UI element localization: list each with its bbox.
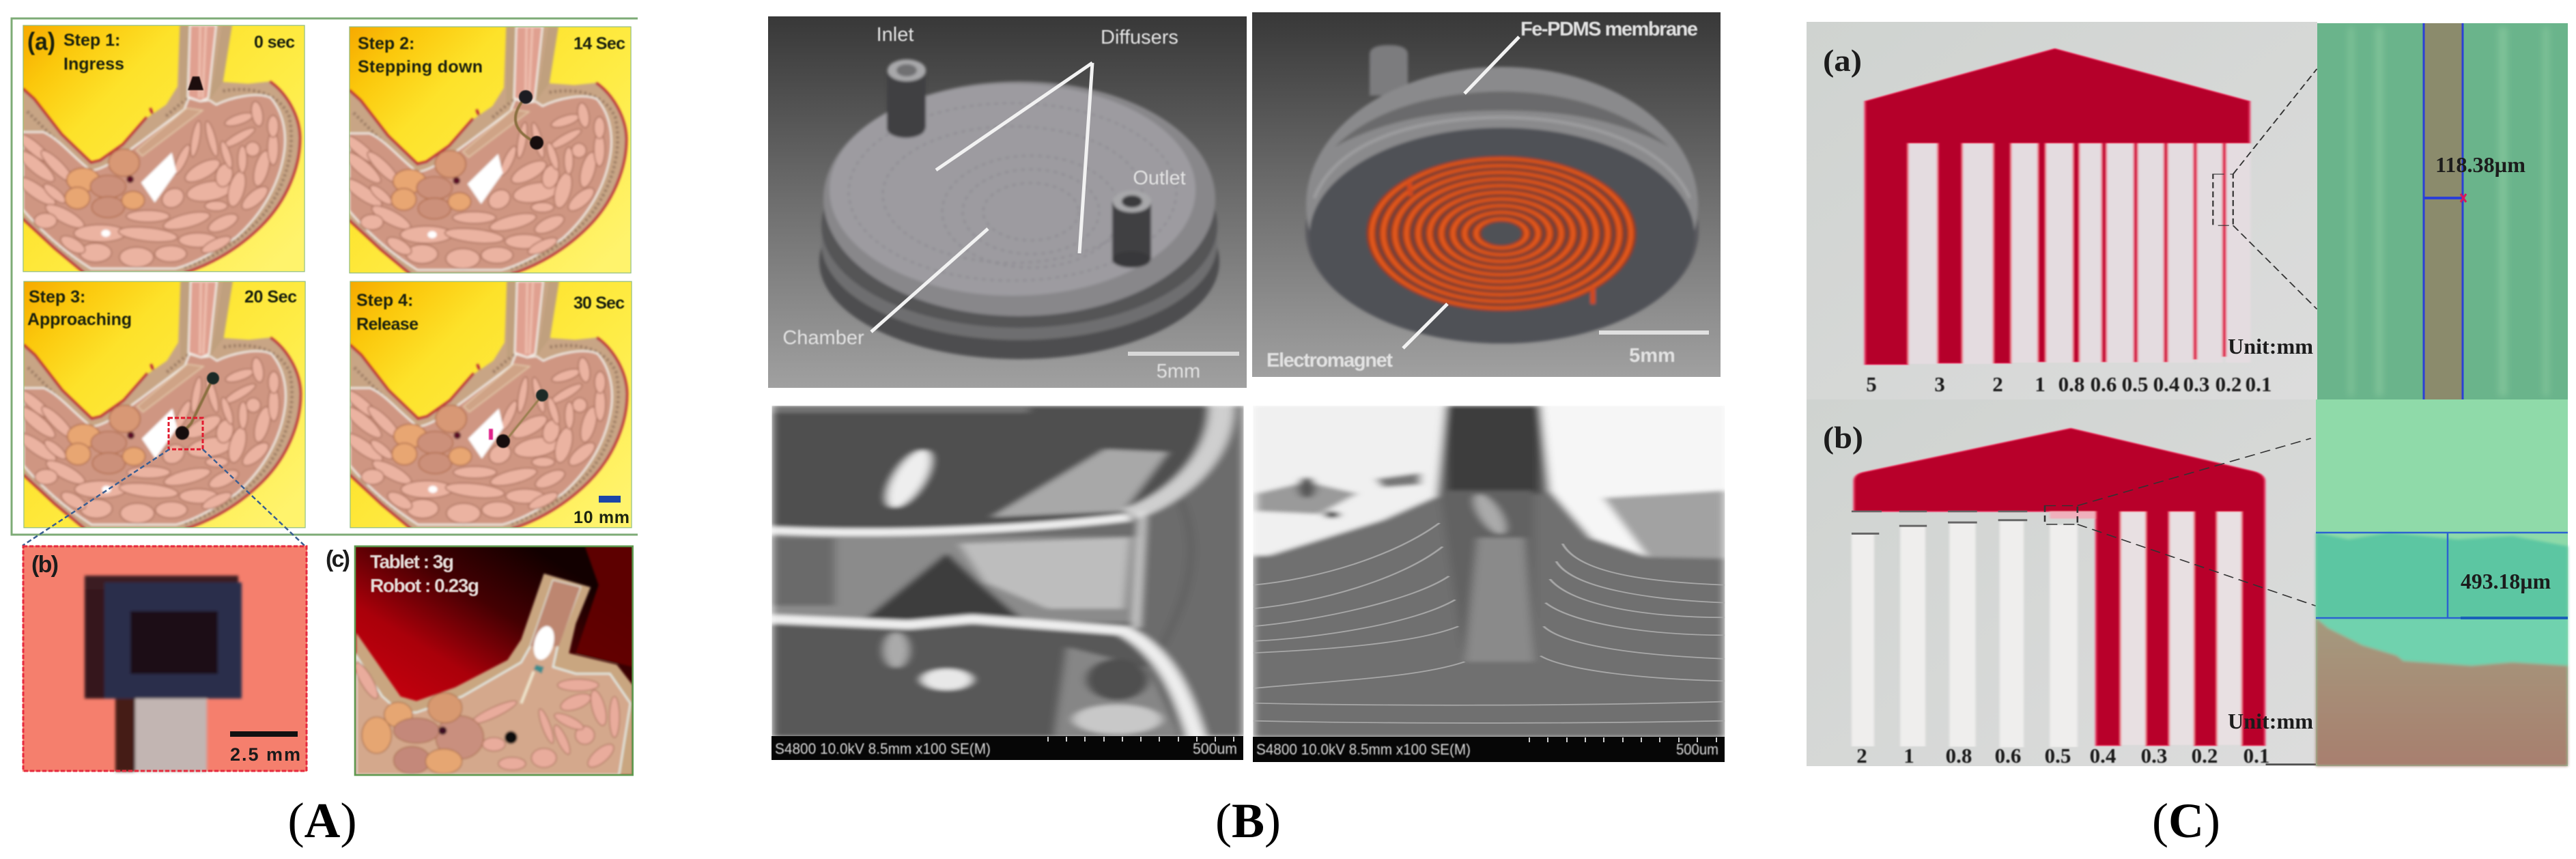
- 3D model labels: Inlet: [877, 24, 914, 46]
- zoom connector lines: [23, 449, 305, 546]
- coil model labels: Electromagnet: [1266, 350, 1393, 371]
- icon: robot stepping: [515, 90, 543, 150]
- width labels b: 0.6: [1995, 744, 2021, 768]
- 3D model labels: 5mm: [1157, 361, 1200, 382]
- step 1 labels: Step 1:: [63, 31, 120, 50]
- step 2 panel: [340, 27, 632, 274]
- 3D model labels: [782, 24, 1200, 382]
- measurement value a: 118.38µm: [2435, 152, 2525, 177]
- zoom marker: red dashed box: [169, 418, 203, 449]
- photo a: comb pattern: [1807, 22, 2317, 399]
- unit label b: Unit:mm: [2228, 709, 2313, 733]
- step 2 labels: Step 2:: [358, 34, 414, 53]
- 3D model labels: Diffusers: [1101, 27, 1178, 48]
- 3D model: top view: [768, 16, 1247, 388]
- width labels a: 0.4: [2153, 372, 2179, 396]
- caption B: (B): [1215, 793, 1281, 848]
- scale bar 10 mm: 10 mm: [574, 508, 629, 527]
- leader lines: [871, 63, 1092, 332]
- SEM info bar right: S4800 10.0kV 8.5mm x100 SE(M): [1256, 741, 1471, 758]
- panel C: printed comb test patterns: [1807, 22, 2568, 848]
- SEM micrograph right: [1253, 406, 1725, 762]
- width labels b: 0.5: [2045, 744, 2071, 768]
- coil model labels: Fe-PDMS membrane: [1520, 18, 1698, 40]
- step 4 panel: [341, 281, 632, 529]
- step 3 panel: [14, 281, 306, 529]
- 3D model labels: Chamber: [782, 327, 864, 349]
- measurement value b: 493.18µm: [2461, 569, 2551, 593]
- step 4 labels: [356, 291, 625, 334]
- step 2 labels: 14 Sec: [574, 34, 625, 53]
- step 1 labels: Ingress: [63, 55, 124, 74]
- icon: robot in oesophagus: [188, 76, 203, 90]
- coil model labels: [1266, 18, 1698, 371]
- step 2 labels: Stepping down: [358, 57, 483, 76]
- width labels a: 0.6: [2091, 372, 2117, 396]
- width labels a: [1866, 372, 2271, 396]
- step 2 labels: [358, 34, 625, 76]
- width labels b: 0.4: [2090, 744, 2116, 768]
- unit label a: Unit:mm: [2228, 334, 2313, 358]
- width labels b: 0.3: [2141, 744, 2167, 768]
- width labels a: 1: [2035, 372, 2046, 396]
- SEM info bar left: S4800 10.0kV 8.5mm x100 SE(M): [775, 740, 991, 757]
- width labels a: 3: [1934, 372, 1945, 396]
- sub-label c: (c): [326, 546, 350, 572]
- 3D model: bottom view with coil: [1252, 12, 1721, 377]
- icon: robot approaching: [175, 372, 219, 440]
- panel A: stomach robot figure: [12, 18, 638, 848]
- width labels b: 2: [1856, 744, 1867, 768]
- SEM info bar right: [1253, 737, 1725, 762]
- width labels a: 0.8: [2058, 372, 2084, 396]
- step 3 labels: [27, 287, 297, 329]
- caption A: (A): [287, 793, 357, 848]
- micrograph a: line width measurement: [2317, 23, 2568, 399]
- SEM micrograph left: [772, 406, 1244, 760]
- width labels b: 1: [1903, 744, 1914, 768]
- scale bar 2.5 mm: 2.5 mm: [230, 744, 300, 765]
- photo b: comb after release: [1807, 399, 2316, 768]
- width labels b: 0.1: [2244, 744, 2269, 768]
- tablet and robot mass labels: Robot : 0.23g: [370, 575, 479, 596]
- step 3 labels: Step 3:: [29, 287, 85, 307]
- width labels a: 0.2: [2216, 372, 2241, 396]
- SEM info bar left: 500um: [1193, 740, 1237, 757]
- width labels a: 0.3: [2183, 372, 2209, 396]
- step 1 labels: [27, 27, 295, 74]
- 3D model labels: Outlet: [1133, 167, 1186, 189]
- green frame around sub-panel a: [12, 18, 638, 535]
- sub-label a: (a): [1823, 43, 1862, 78]
- panel c: tablet and robot: [351, 546, 633, 775]
- sub-label b: (b): [1823, 420, 1863, 455]
- SEM info bar right: 500um: [1676, 741, 1718, 758]
- tablet and robot mass labels: [370, 551, 479, 596]
- tablet and robot mass labels: Tablet : 3g: [370, 551, 454, 572]
- step 4 labels: Release: [356, 315, 419, 334]
- scale bar 5mm: [1599, 330, 1709, 335]
- width labels b: [1856, 744, 2269, 768]
- SEM info bar left: [772, 736, 1243, 760]
- micrograph b: gap measurement: [2316, 399, 2568, 766]
- step 1 panel: [14, 25, 305, 272]
- width labels a: 0.1: [2246, 372, 2271, 396]
- coil model labels: 5mm: [1629, 345, 1675, 367]
- step 3 labels: Approaching: [27, 310, 132, 329]
- step 4 labels: 30 Sec: [574, 294, 625, 313]
- step 1 labels: (a): [27, 27, 55, 55]
- panel B: micropump design and SEM: [768, 12, 1725, 848]
- width labels b: 0.8: [1946, 744, 1972, 768]
- scale bar 10 mm: [574, 496, 629, 527]
- width labels a: 0.5: [2122, 372, 2148, 396]
- step 3 labels: 20 Sec: [244, 287, 297, 307]
- width labels a: 5: [1866, 372, 1877, 396]
- step 1 labels: 0 sec: [254, 33, 295, 52]
- scale bar 5mm: [1128, 352, 1239, 356]
- panel b: robot close-up: [23, 546, 307, 772]
- step 4 labels: Step 4:: [356, 291, 413, 310]
- sub-label b: (b): [31, 552, 59, 578]
- leader lines: [1403, 37, 1519, 348]
- caption C: (C): [2152, 793, 2220, 848]
- scale bar 2.5 mm: [230, 731, 300, 765]
- width labels a: 2: [1992, 372, 2003, 396]
- width labels b: 0.2: [2192, 744, 2218, 768]
- coil: [1372, 159, 1631, 308]
- icon: robot release: [489, 389, 548, 448]
